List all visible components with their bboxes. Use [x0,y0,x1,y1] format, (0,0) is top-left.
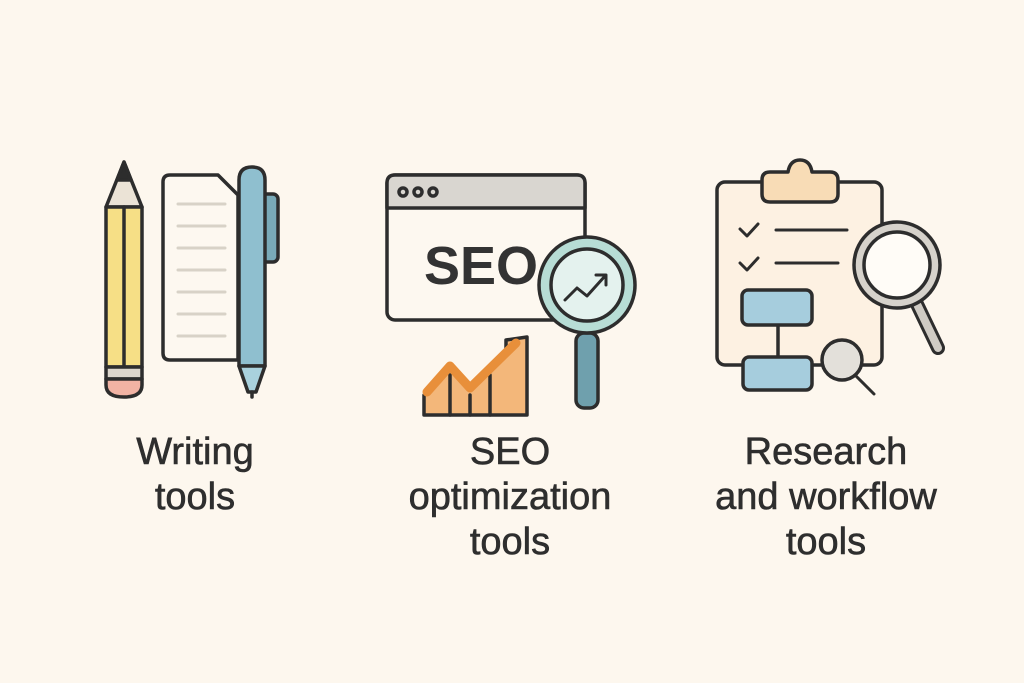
label: seo tools: SEO [470,431,550,473]
icon: teal magnifier [539,237,635,408]
label: seo tools [409,431,611,563]
label: research tools: Research [745,431,907,473]
icon: browser SEO: SEO [424,236,538,296]
label: writing tools: Writing [136,431,254,473]
icon: big magnifier [854,222,940,348]
label: seo tools: tools [470,521,550,563]
label: research tools: tools [786,521,866,563]
icon: orange chart [424,337,527,415]
icon: pen [239,167,278,397]
label: seo tools: optimization [409,476,611,518]
icon: pencil [106,162,142,397]
label: writing tools [136,431,254,518]
icon: clipboard [717,160,882,390]
label: writing tools: tools [155,476,235,518]
icon: small magnifier [822,340,874,394]
label: research tools: and workflow [715,476,937,518]
icon: browser SEO [387,175,585,320]
label: research tools [715,431,938,563]
icon: document [163,175,238,360]
